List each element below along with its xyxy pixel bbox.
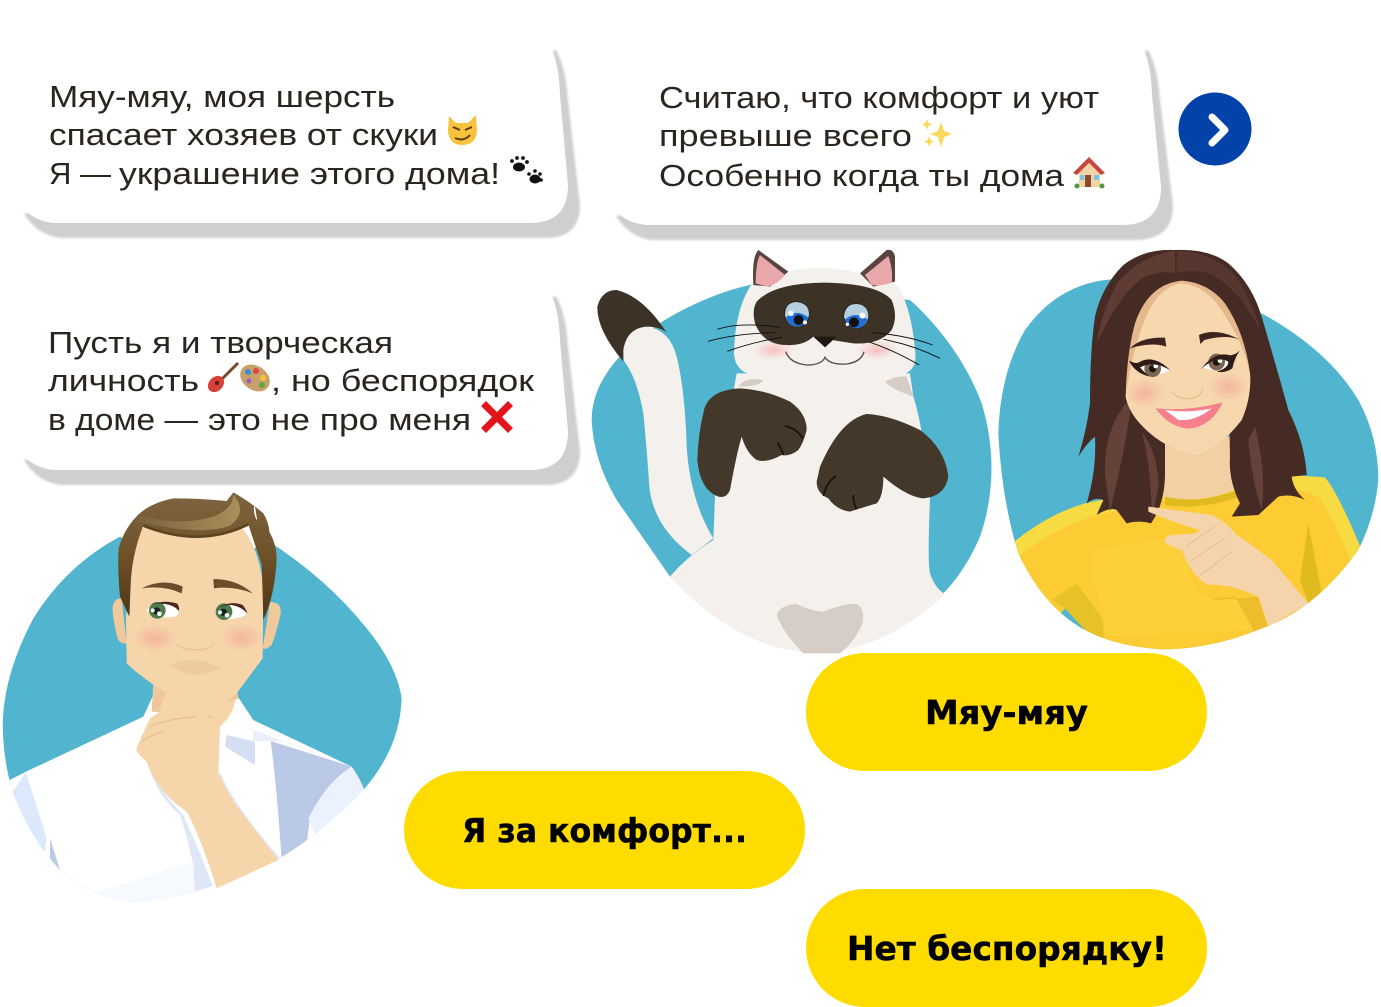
man lips [170, 660, 221, 675]
man speech text: личность [48, 363, 199, 398]
illustration: woman on blue blob [995, 250, 1378, 653]
woman blush [1125, 372, 1248, 408]
man speech text: в доме — [48, 402, 198, 437]
cat speech text: спасает хозяев от скуки [49, 117, 438, 152]
icon: paw prints emoji [510, 156, 543, 184]
man speech text: это не про меня [208, 402, 471, 437]
cat nose [813, 337, 837, 347]
woman smile [1156, 402, 1223, 429]
woman neck [1163, 437, 1238, 499]
icon: house emoji [1073, 157, 1105, 188]
speech bubble: man [20, 296, 580, 485]
cat left paw [697, 388, 807, 497]
button: Я за комфорт [404, 771, 805, 889]
cat speech text: Я — [49, 156, 111, 191]
cat eyes [784, 301, 869, 329]
woman eyebrows [1130, 332, 1239, 348]
woman speech text: Особенно когда ты дома [659, 158, 1065, 193]
icon: palette emoji [235, 359, 275, 397]
cat ears [753, 250, 895, 287]
cat tail [597, 290, 713, 555]
woman hand [1148, 507, 1308, 627]
man eyebrows [142, 579, 253, 593]
cat speech text: Мяу-мяу, моя шерсть [49, 79, 395, 114]
woman speech text: превыше всего [659, 118, 912, 153]
cat belly patch [777, 604, 863, 653]
man speech text: Пусть я и творческая [48, 325, 393, 360]
cat speech text: украшение этого дома! [119, 156, 500, 191]
man ears [113, 598, 281, 649]
cat mask [754, 283, 895, 345]
cat mouth [786, 352, 864, 365]
icon: sparkles emoji [922, 119, 952, 147]
blue blob [3, 537, 402, 902]
man neck [152, 682, 238, 715]
man eyes [145, 602, 247, 620]
cat right paw [817, 414, 948, 512]
cat body [670, 373, 945, 653]
cat blush [753, 340, 897, 360]
woman speech text [659, 80, 1099, 193]
woman nose [1172, 388, 1202, 399]
blue blob [998, 279, 1378, 649]
speech bubble: cat [20, 50, 580, 238]
next arrow button [1178, 92, 1252, 166]
icon: guitar emoji [205, 363, 238, 395]
man blush [133, 624, 263, 652]
woman collar [1165, 488, 1242, 507]
blue blob [592, 283, 991, 653]
woman face [1126, 281, 1250, 455]
cat speech text [49, 79, 500, 191]
man speech text [48, 325, 534, 437]
woman eyes [1129, 351, 1240, 377]
button: Мяу-мяу: Мяу-мяу [925, 693, 1088, 732]
icon: smirking cat emoji [448, 115, 477, 145]
button: Нет беспорядку: Нет беспорядку! [847, 929, 1167, 968]
button: Нет беспорядку [806, 889, 1207, 1007]
woman speech text: Считаю, что комфорт и уют [659, 80, 1099, 115]
button: Я за комфорт: Я за комфорт... [462, 811, 747, 850]
man face [126, 523, 263, 715]
man nose [177, 644, 213, 650]
man shirt [10, 697, 364, 902]
illustration: thinking man on blue blob [0, 492, 402, 918]
man hair [118, 492, 277, 620]
man hand [136, 690, 278, 888]
woman hair [1078, 250, 1307, 523]
illustration: cat on blue blob [592, 250, 991, 653]
icon: red cross mark [486, 406, 508, 428]
woman yellow shirt [995, 475, 1362, 653]
cat whiskers [708, 325, 940, 365]
speech bubble: woman [612, 50, 1173, 240]
man speech text: , но беспорядок [271, 363, 534, 398]
cat head [734, 268, 916, 380]
button: Мяу-мяу [806, 653, 1207, 771]
cat shoulders [738, 376, 913, 397]
